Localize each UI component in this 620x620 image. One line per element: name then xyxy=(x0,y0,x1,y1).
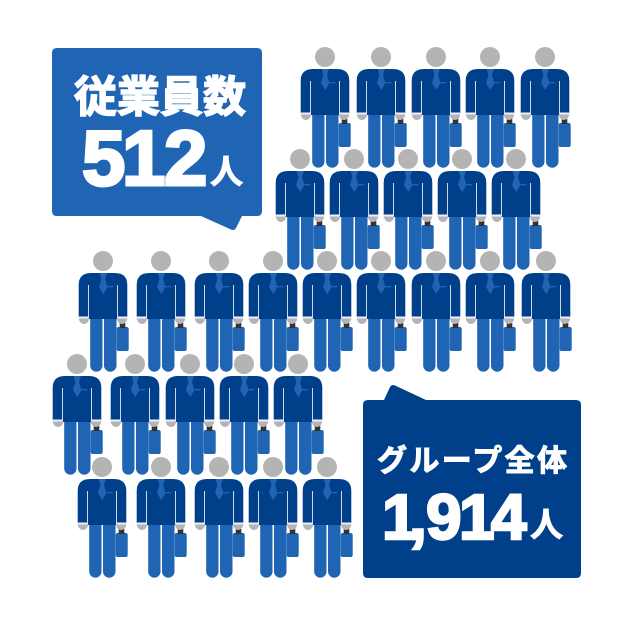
people: row 4 xyxy=(53,354,324,475)
number: 512 people: 512 xyxy=(82,114,207,202)
callout: group total 1,914 xyxy=(363,385,581,578)
callout: employees 512 xyxy=(52,48,262,230)
number: 1,914 people: 1,914 xyxy=(382,481,527,553)
people: row 1 xyxy=(301,47,571,168)
unit: people: 人 xyxy=(530,506,563,543)
people: row 3 xyxy=(79,251,572,372)
unit: people: 人 xyxy=(210,153,243,190)
people: row 5 xyxy=(78,457,353,578)
people: row 2 xyxy=(276,149,542,270)
heading: employees: 従業員数 xyxy=(74,74,246,122)
heading: group total: グループ全体 xyxy=(377,445,567,478)
